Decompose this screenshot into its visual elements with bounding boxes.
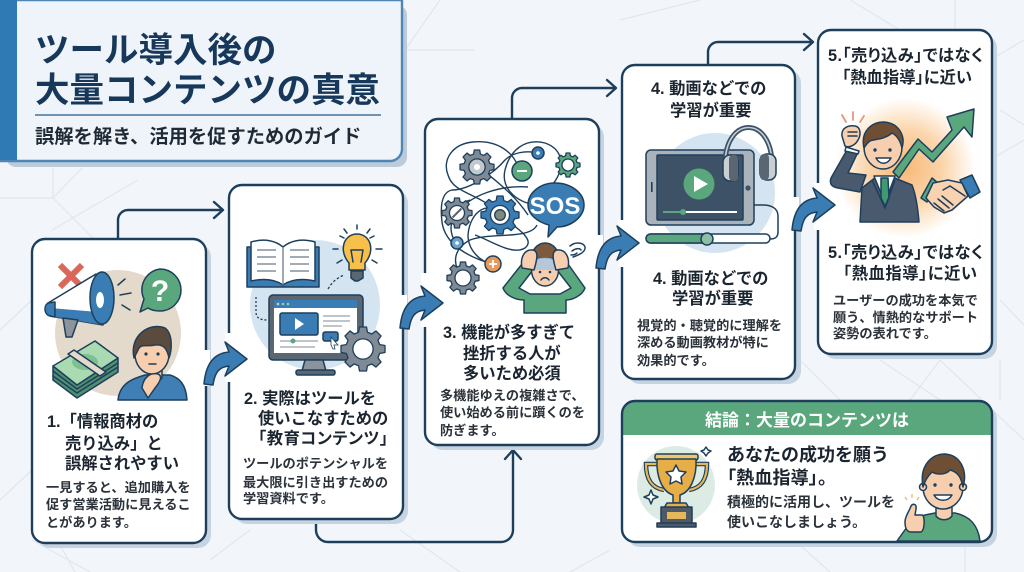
icon: tangled gears, SOS bubble and overwhelmed person (441, 142, 585, 313)
flow arrow 4 to 5 (792, 188, 835, 231)
panel: step 1 (32, 239, 211, 548)
step 4 body: 深める動画教材が特に (637, 334, 769, 350)
step 2 heading: 2. 実際はツールを (244, 390, 376, 408)
step 5 top heading (828, 47, 983, 87)
step 5 body: 願う、情熱的なサポート (833, 309, 978, 325)
connector arrow 2 to 3 (316, 450, 521, 542)
panel: step 5 (814, 30, 997, 359)
step 3 body: 多機能ゆえの複雑さで、 (440, 387, 585, 403)
step 4 lower heading: 4. 動画などでの (653, 270, 768, 288)
step 1 heading: 1.「情報商材の (47, 412, 158, 431)
step 4 lower heading (653, 270, 768, 308)
icon: megaphone, money and puzzled man: ? (151, 275, 169, 308)
step 1 body (46, 479, 191, 530)
step 1 body: とがあります。 (46, 514, 137, 530)
step 5 top heading: 「熱血指導」に近い (842, 68, 972, 87)
step 5 lower heading (828, 244, 983, 283)
connector arrow 4 to 5 (708, 34, 813, 65)
conclusion header band: 結論：大量のコンテンツは (705, 411, 909, 430)
step 2 body: ツールのポテンシャルを (243, 456, 388, 471)
step 5 body: ユーザーの成功を本気で (833, 292, 978, 308)
title panel (0, 0, 407, 167)
step 5 top heading: 5.「売り込み」ではなく (828, 47, 983, 65)
title heading (35, 32, 380, 110)
panel: step 2 (225, 185, 408, 524)
connector arrow 3 to 4 (512, 80, 616, 119)
panel: step 3 (421, 119, 604, 450)
step 4 top heading (651, 80, 766, 120)
step 4 body: 効果的です。 (637, 353, 715, 368)
conclusion supporting text: 使いこなしましょう。 (727, 514, 866, 530)
conclusion main message: あなたの成功を願う (727, 444, 889, 465)
step 4 body (637, 317, 782, 368)
step 1 body: 一見すると、追加購入を (46, 479, 191, 495)
step 2 body: 最大限に引き出すための (243, 474, 388, 490)
icon: confident businessman, growth arrow and handshake (830, 98, 980, 238)
step 5 body (833, 292, 978, 341)
step 5 body: 姿勢の表れです。 (833, 325, 937, 341)
step 4 top heading: 学習が重要 (670, 101, 751, 120)
step 3 heading (443, 323, 575, 383)
icon: book, bulb, monitor and gear (247, 225, 385, 375)
step 2 heading: 「教育コンテンツ」 (258, 429, 388, 448)
step 5 lower heading: 5.「売り込み」ではなく (828, 244, 983, 262)
conclusion supporting text: 積極的に活用し、ツールを (727, 494, 895, 510)
step 1 heading: 誤解されやすい (65, 455, 179, 473)
step 1 heading (47, 412, 179, 473)
step 2 body: 学習資料です。 (243, 490, 334, 506)
icon: megaphone, money and puzzled man (45, 265, 187, 400)
step 3 heading: 挫折する人が (463, 344, 561, 363)
icon: gold trophy (637, 446, 715, 527)
title heading: ツール導入後の (35, 32, 276, 70)
flow arrow 1 to 2 (204, 342, 247, 385)
flow arrow 2 to 3 (400, 286, 443, 329)
icon: tablet video player with headphones (646, 128, 778, 253)
flow arrow 3 to 4 (596, 226, 639, 269)
conclusion supporting text (727, 494, 895, 530)
icon: smiling man with thumbs up (897, 454, 980, 541)
conclusion main message (727, 444, 889, 488)
step 3 heading: 多いため必須 (463, 365, 561, 383)
step 1 body: 促す営業活動に見えるこ (46, 496, 191, 512)
step 4 body: 視覚的・聴覚的に理解を (637, 317, 782, 333)
step 2 heading: 使いこなすための (258, 410, 388, 428)
panel: step 4 (618, 65, 801, 384)
icon: tangled gears, SOS bubble and overwhelmed person: SOS (530, 193, 580, 220)
step 3 heading: 3. 機能が多すぎて (443, 323, 575, 342)
step 1 heading: 売り込み」と (65, 435, 163, 453)
step 4 top heading: 4. 動画などでの (651, 80, 766, 98)
subtitle: 誤解を解き、活用を促すためのガイド (35, 126, 361, 148)
step 3 body: 防ぎます。 (440, 422, 505, 438)
title heading: 大量コンテンツの真意 (35, 72, 380, 110)
step 2 heading (244, 390, 388, 448)
step 2 body (243, 456, 388, 506)
step 3 body (440, 387, 585, 438)
panel: conclusion (622, 401, 997, 547)
step 3 body: 使い始める前に躓くのを (440, 404, 585, 420)
step 5 lower heading: 「熱血指導」に近い (843, 264, 977, 283)
conclusion header band (622, 401, 992, 435)
step 4 lower heading: 学習が重要 (672, 289, 753, 308)
conclusion main message: 「熱血指導」。 (727, 467, 827, 488)
connector arrow 1 to 2 (118, 202, 223, 238)
